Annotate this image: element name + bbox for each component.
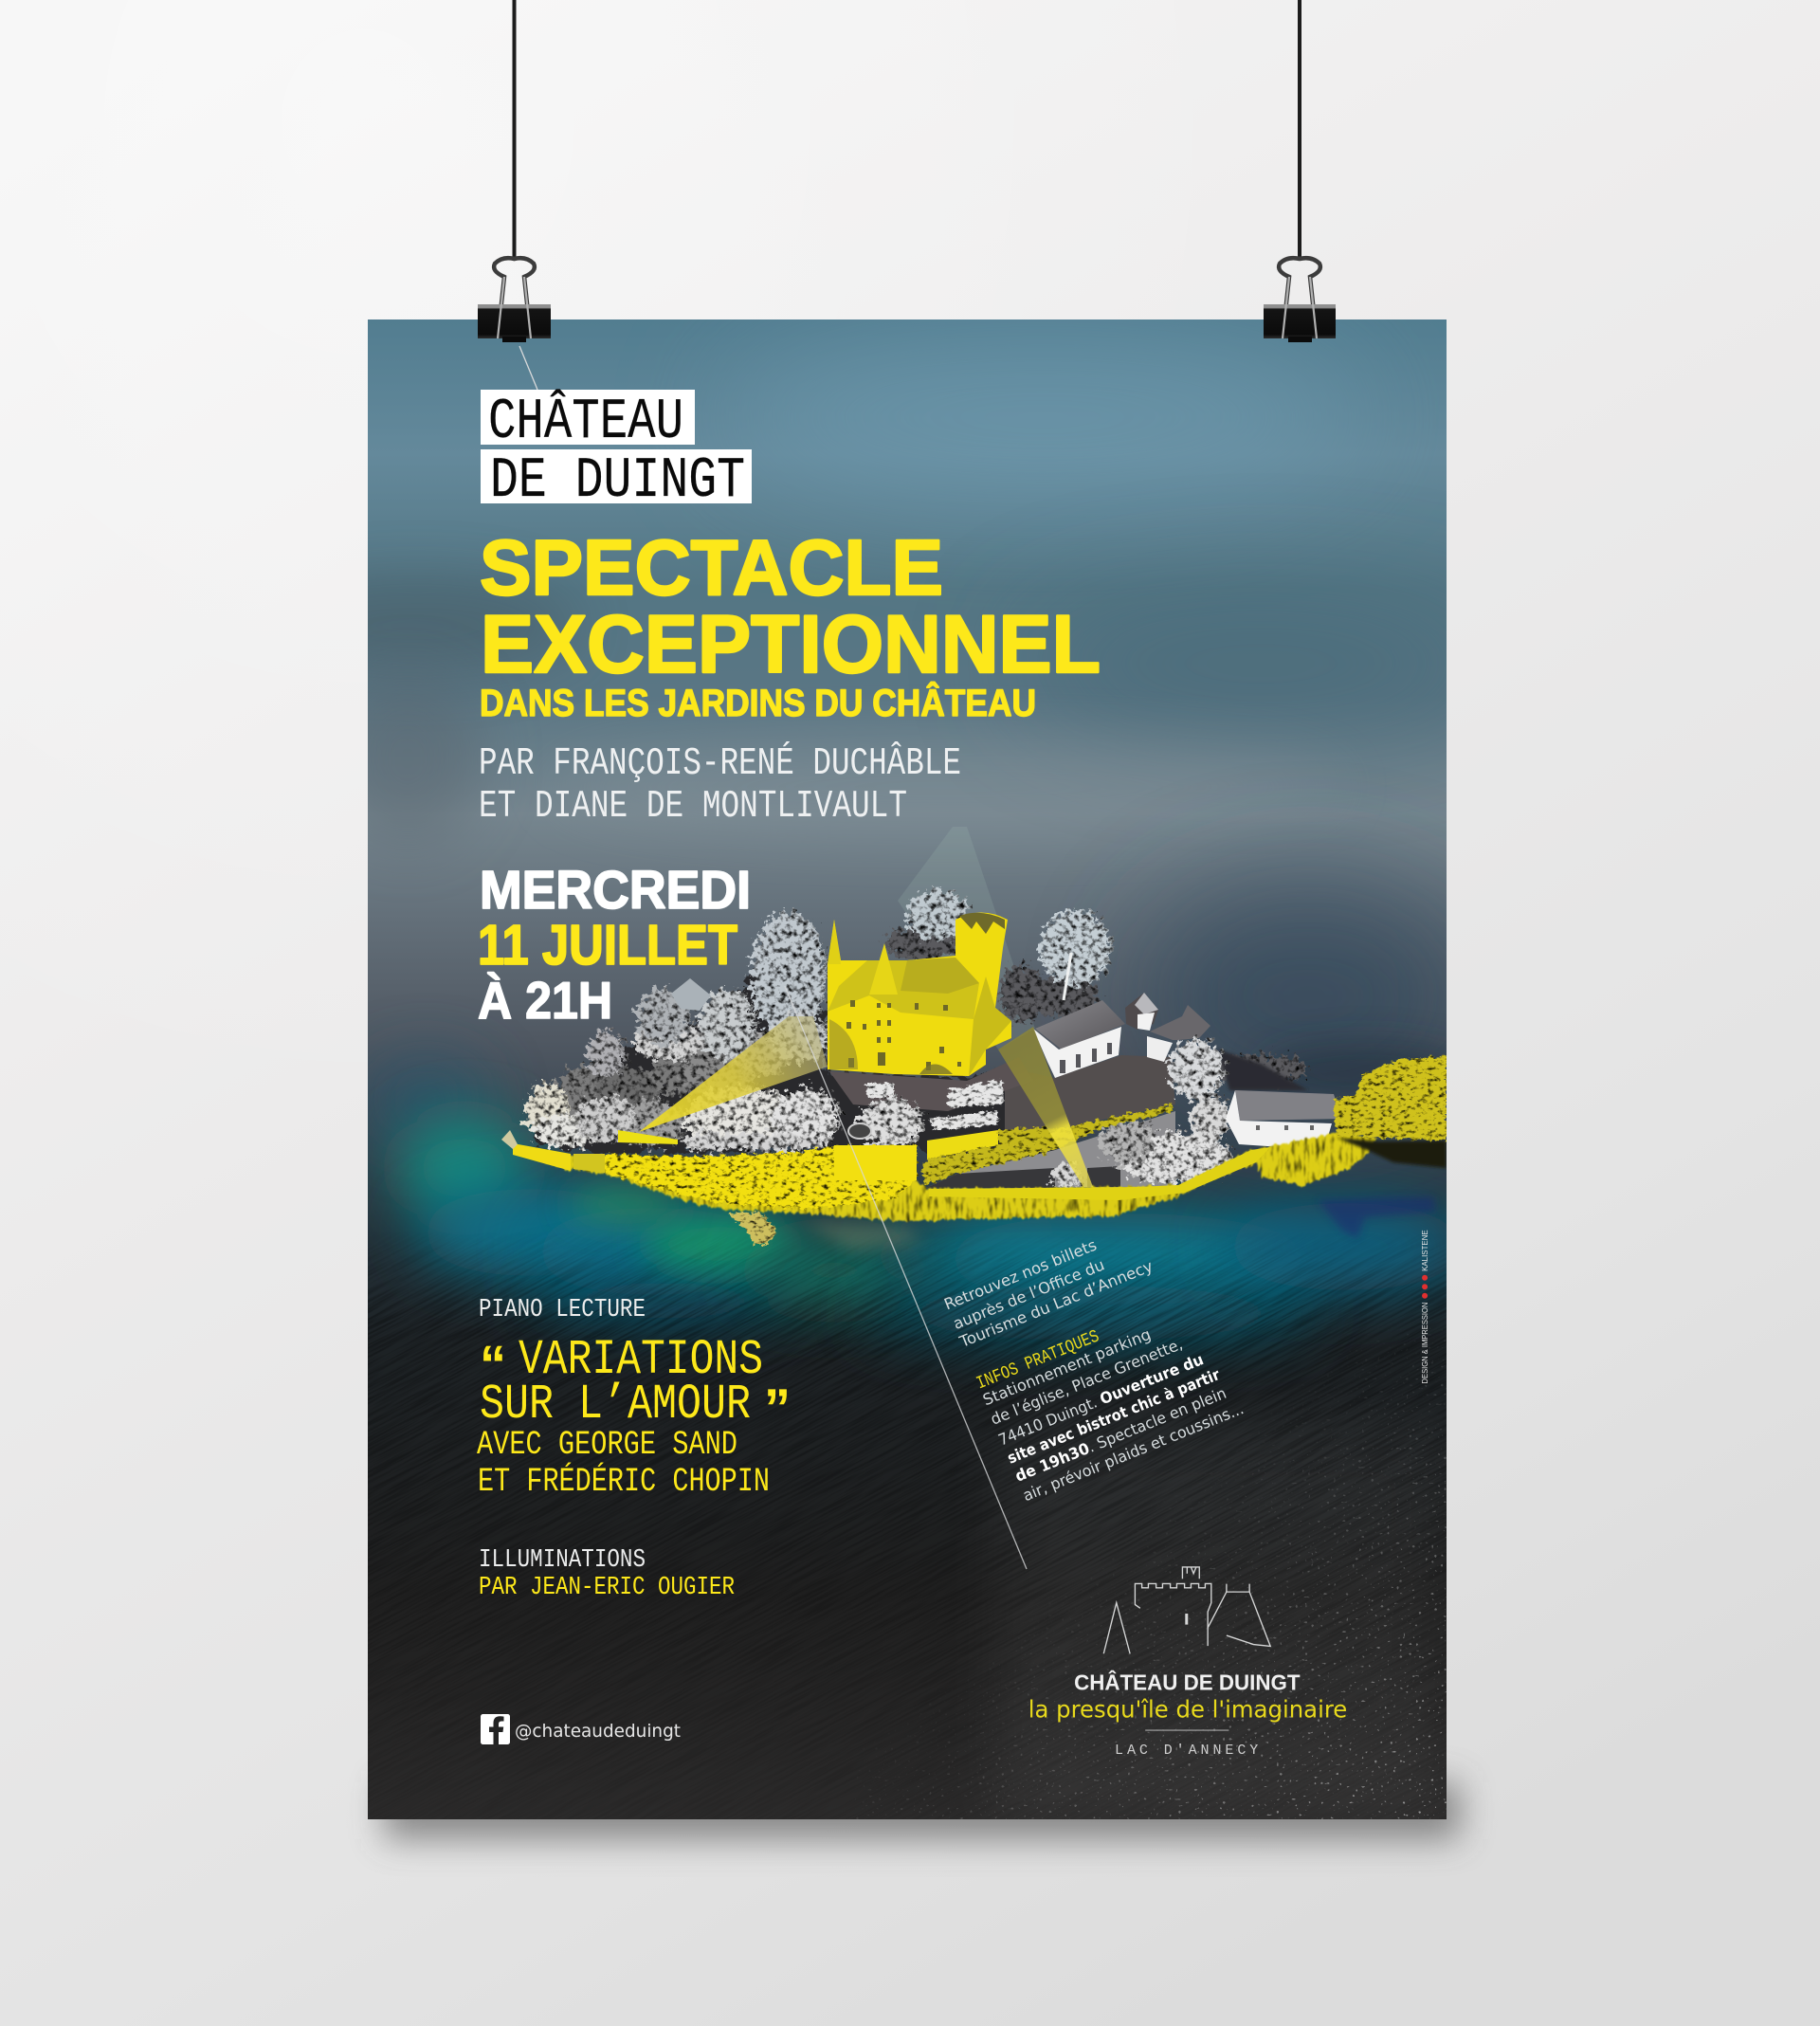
practical information, rotated: Stationnement parking [980,1325,1154,1409]
house B [1147,1005,1210,1062]
central trees [682,1086,923,1152]
title block: Château de Duingt: DE DUINGT [490,449,745,514]
poster shadow [384,1782,1460,1839]
lake colours [360,1052,1469,1342]
headline: EXCEPTIONNEL [481,599,1101,690]
small roof among the trees [671,978,711,1011]
well [848,1123,871,1139]
island illustration [501,827,1447,1251]
icon: facebook [481,1714,510,1744]
artists: ET DIANE DE MONTLIVAULT [479,785,907,829]
icon: castle line drawing [1103,1567,1270,1653]
show title: ” [764,1378,791,1437]
water ripples [368,1250,1447,1585]
roofs [828,958,979,1019]
show title: SUR L’AMOUR [480,1377,751,1433]
chateau logo: LAC D'ANNECY [1115,1743,1258,1759]
house at the water [1226,1090,1341,1150]
facebook handle [481,1714,681,1744]
thin diagonal line [519,346,1027,1569]
chateau logo: la presqu'île de l'imaginaire [1028,1696,1347,1724]
headline: SPECTACLE [480,523,943,611]
practical information, rotated: INFOS PRATIQUES [974,1326,1102,1394]
title block: Château de Duingt: CHÂTEAU [488,390,683,455]
light beams in yellow [639,1016,1093,1187]
yellow bush at right [1334,1057,1447,1168]
pale light beam in the sky [898,827,1035,1050]
illuminations credit [479,1546,735,1602]
rock reflection [728,1212,777,1244]
printer credit, vertical: DESIGN & IMPRESSION [1421,1303,1429,1383]
illuminations credit: ILLUMINATIONS [479,1546,646,1575]
practical information, rotated: Tourisme du Lac d’Annecy [956,1257,1156,1351]
artists [479,741,961,829]
date [478,860,751,1030]
tower top shadow [959,913,1005,934]
practical information, rotated: 74410 Duingt. Ouverture du [995,1350,1206,1450]
sparkles [853,1327,1447,1819]
chateau logo [1028,1567,1347,1759]
upper terrace walls [927,1130,998,1159]
show title [477,1332,791,1501]
road and walls below castle [829,1057,1033,1130]
show title: ET FRÉDÉRIC CHOPIN [478,1462,770,1501]
chateau logo: CHÂTEAU DE DUINGT [1074,1669,1301,1694]
date: MERCREDI [480,860,751,921]
dark trees behind [884,926,1308,1085]
castle ramparts [605,1145,917,1209]
practical information, rotated: air, prévoir plaids et coussins... [1020,1399,1247,1505]
date: À 21H [478,971,612,1030]
illuminations credit: PAR JEAN-ERIC OUGIER [479,1574,735,1602]
practical information, rotated: de 19h30. Spectacle en plein [1012,1384,1228,1486]
practical information, rotated [941,1236,1247,1505]
lower garden [926,1111,1175,1188]
practical information, rotated: Retrouvez nos billets [941,1236,1100,1313]
village buildings [1033,993,1341,1189]
show title: VARIATIONS [519,1332,763,1388]
printer credit, vertical: KALISTENE [1421,1230,1429,1271]
practical information, rotated: de l’église, Place Grenette, [988,1335,1185,1429]
date: 11 JUILLET [478,914,737,976]
shore vegetation [513,1133,1377,1221]
house A [1033,1000,1125,1078]
tree masses [525,890,1112,1147]
dark hedge [1218,1050,1308,1090]
show title: “ [480,1334,506,1394]
practical information, rotated: auprès de l’Office du [951,1256,1107,1333]
soft light on the lower paper [1012,1439,1429,1799]
poster background: sky and lake [368,319,1447,1819]
programme [477,1296,791,1501]
tree trunk [1064,953,1071,1000]
ground right of the castle [1005,1055,1175,1133]
castle in yellow [828,912,1011,1076]
artists: PAR FRANÇOIS-RENÉ DUCHÂBLE [479,741,961,786]
facebook handle: @chateaudeduingt [515,1721,681,1742]
title block: Château de Duingt [481,390,752,514]
dark island mass [531,958,1047,1176]
headline [480,523,1101,724]
yellow shoreline and walls [501,1104,1377,1251]
headline: DANS LES JARDINS DU CHÂTEAU [480,681,1036,724]
windows [846,1000,961,1070]
left binder clip and string [478,0,551,342]
chapel tower [1125,993,1158,1031]
poster [368,319,1447,1819]
printer credit, vertical [1421,1230,1429,1383]
path along the shore [929,1147,1270,1200]
trees beside the village [1051,1039,1232,1189]
shaded base [829,1019,858,1069]
show title: AVEC GEORGE SAND [477,1426,737,1464]
practical information, rotated: site avec bistrot chic à partir [1005,1365,1223,1468]
right binder clip and string [1264,0,1336,342]
programme: PIANO LECTURE [479,1296,646,1324]
